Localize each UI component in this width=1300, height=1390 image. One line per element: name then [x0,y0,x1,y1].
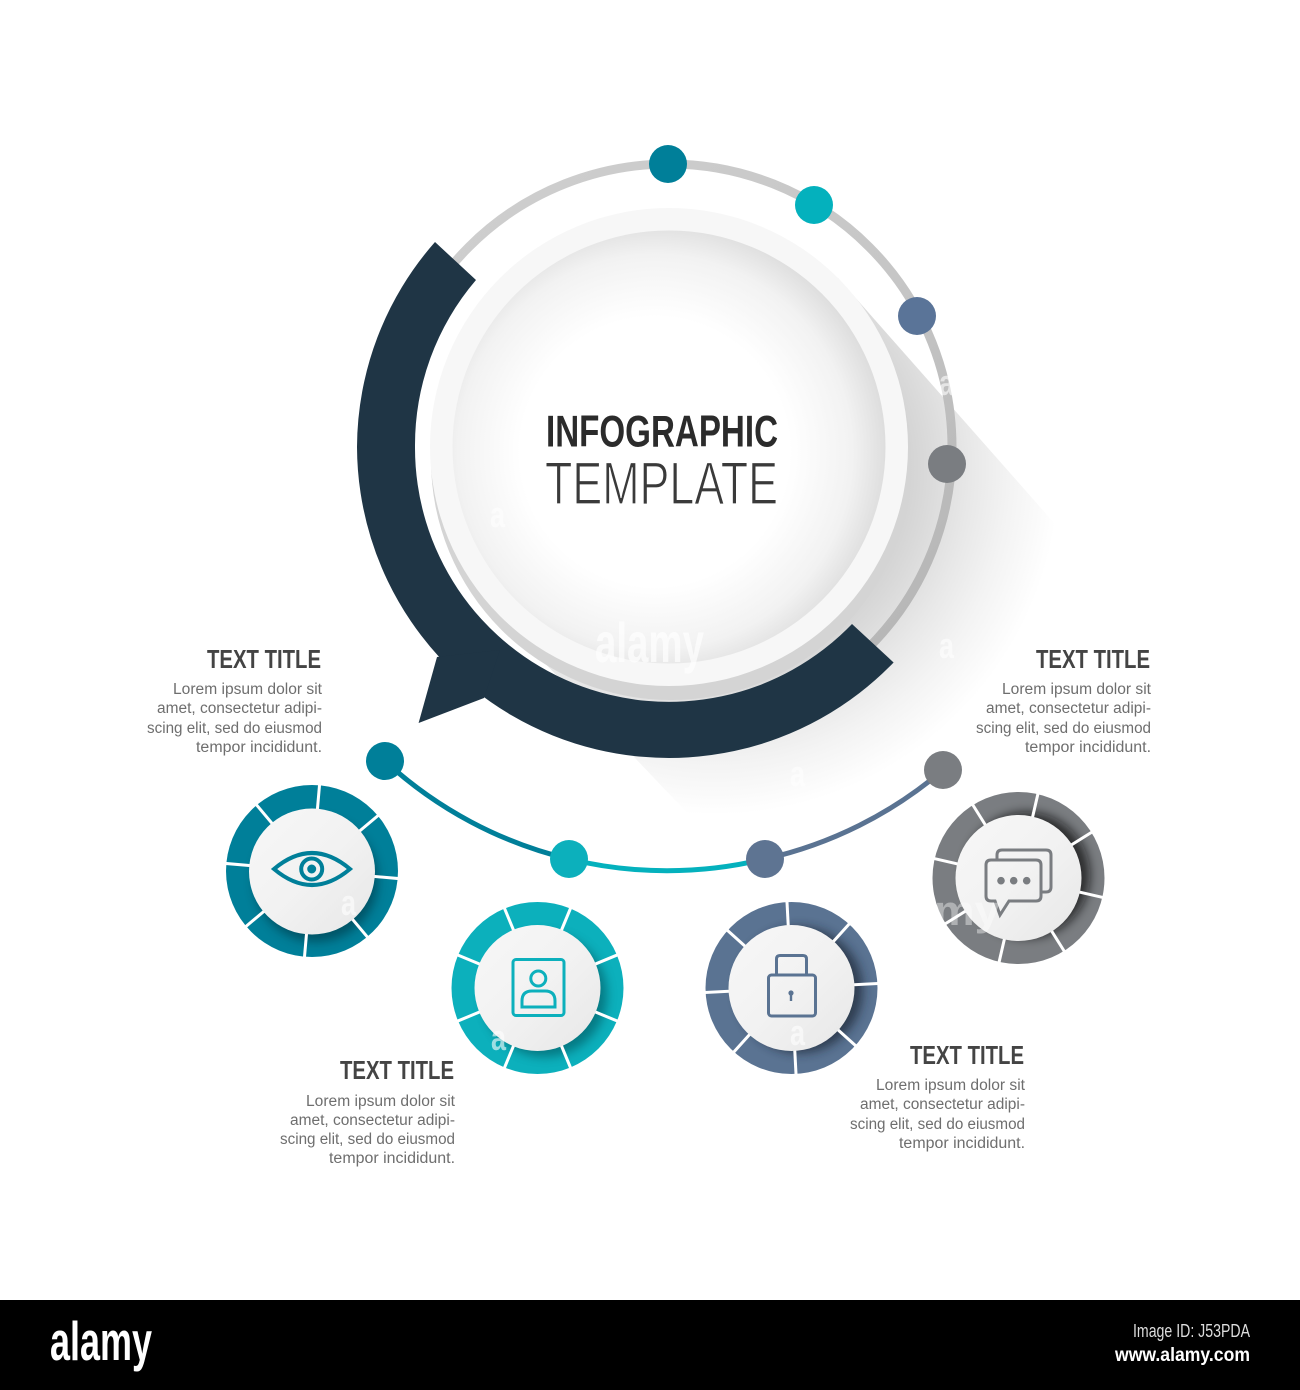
footer logo: alamy [50,1310,152,1372]
text block: upper left: amet, consectetur adipi- [157,700,322,717]
watermarks [341,362,1001,1058]
text block: upper right: amet, consectetur adipi- [986,700,1151,717]
text block: lower left: scing elit, sed do eiusmod [280,1131,455,1148]
text block: lower right: tempor incididunt. [899,1135,1025,1152]
text block: upper left: TEXT TITLE [207,644,321,674]
text block: upper left: Lorem ipsum dolor sit [173,681,323,698]
icon: padlock [768,956,816,1016]
text block: lower left: tempor incididunt. [329,1150,455,1167]
icon: eye [274,853,350,885]
watermarks: a [490,494,506,535]
text block: lower left: Lorem ipsum dolor sit [306,1093,456,1110]
dark speech-bubble arc [357,242,894,758]
text block: lower right: amet, consectetur adipi- [860,1096,1025,1113]
step 4 ring: chat [932,792,1104,964]
watermarks: a [790,1012,806,1053]
website: www.alamy.com [1114,1345,1250,1366]
thin grey orbit ring [386,164,952,730]
text block: lower right: scing elit, sed do eiusmod [850,1116,1025,1133]
icon: chat bubbles [986,850,1051,915]
text block: upper left [147,644,323,756]
watermarks: a [491,1017,507,1058]
icon: contact card [513,960,564,1016]
text block: lower left [280,1055,456,1167]
main title [545,408,778,517]
text block: lower right: Lorem ipsum dolor sit [876,1077,1026,1094]
watermarks: my [934,887,1001,934]
text block: upper right: Lorem ipsum dolor sit [1002,681,1152,698]
image id: Image ID: J53PDA [1133,1321,1250,1341]
text block: upper right: scing elit, sed do eiusmod [976,720,1151,737]
step 2 ring: contact [452,902,624,1074]
long shadow of main circle [500,278,1100,900]
text block: lower left: amet, consectetur adipi- [290,1112,455,1129]
text block: upper right: TEXT TITLE [1036,644,1150,674]
text block: upper left: tempor incididunt. [196,739,322,756]
text block: upper right [976,644,1152,756]
connector dots [366,742,962,878]
text block: lower left: TEXT TITLE [340,1055,454,1085]
orbit dots [649,145,966,483]
watermarks: a [939,362,955,403]
text block: lower right [850,1040,1026,1152]
text block: upper left: scing elit, sed do eiusmod [147,720,322,737]
main title: TEMPLATE [545,450,778,517]
text block: upper right: tempor incididunt. [1025,739,1151,756]
footer bar [0,1300,1300,1390]
main circle [430,208,911,700]
watermarks: a [939,625,955,666]
watermarks: a [341,882,357,923]
watermarks: a [790,753,806,794]
main title: INFOGRAPHIC [546,408,778,456]
step 3 ring: lock [706,902,878,1074]
watermark: alamy [595,611,704,674]
step 1 ring: eye [226,785,398,957]
text block: lower right: TEXT TITLE [910,1040,1024,1070]
connector curve [385,761,943,871]
